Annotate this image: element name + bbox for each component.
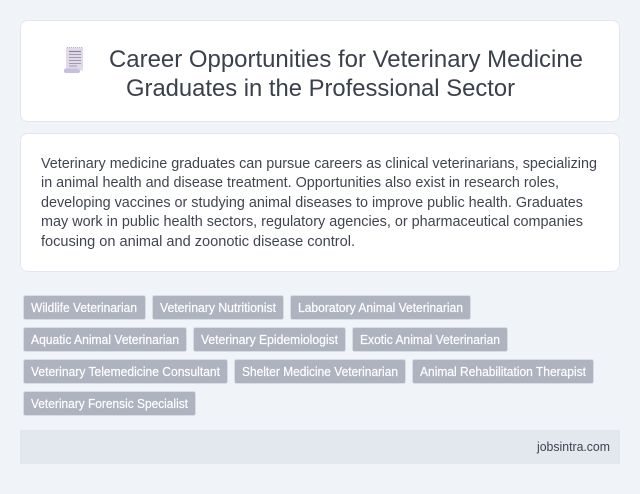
tag: Aquatic Animal Veterinarian: Aquatic Animal Veterinarian [31, 333, 179, 347]
title: Career Opportunities for Veterinary Medicine [109, 46, 583, 73]
tag: Veterinary Epidemiologist: Veterinary Epidemiologist [201, 333, 338, 347]
text block: description: in animal health and disease treatment. Opportunities also exist in research roles, [41, 175, 559, 191]
tag: Exotic Animal Veterinarian [352, 328, 508, 352]
panel: title card [20, 20, 620, 122]
tag: Wildlife Veterinarian [24, 296, 146, 320]
tag: Laboratory Animal Veterinarian [290, 296, 470, 320]
panel: description [20, 134, 620, 272]
tag: Animal Rehabilitation Therapist: Animal Rehabilitation Therapist [420, 365, 586, 379]
title: Graduates in the Professional Sector [126, 75, 515, 102]
title [109, 46, 583, 102]
tag: Veterinary Telemedicine Consultant [24, 360, 228, 384]
tag: Veterinary Forensic Specialist [24, 392, 196, 416]
footer bar [20, 430, 620, 464]
tag: Exotic Animal Veterinarian: Exotic Animal Veterinarian [360, 333, 500, 347]
tag: Animal Rehabilitation Therapist [412, 360, 594, 384]
tag: Veterinary Nutritionist: Veterinary Nutritionist [160, 301, 276, 315]
tag: Aquatic Animal Veterinarian [24, 328, 186, 352]
icon: document scroll [64, 48, 83, 73]
tag: Veterinary Telemedicine Consultant: Veterinary Telemedicine Consultant [31, 365, 220, 379]
tag: Veterinary Forensic Specialist: Veterinary Forensic Specialist [31, 397, 188, 411]
footer text: site name: jobsintra.com [536, 440, 610, 454]
tag: Laboratory Animal Veterinarian: Laboratory Animal Veterinarian [298, 301, 463, 315]
tag: Shelter Medicine Veterinarian [234, 360, 406, 384]
text block: description: may work in public health sectors, regulatory agencies, or pharmaceutical companies [41, 214, 583, 230]
text block: description: Veterinary medicine graduates can pursue careers as clinical veterinarians, specializing [41, 156, 597, 172]
tag list [24, 296, 594, 416]
text block: description [41, 156, 597, 250]
text block: description: developing vaccines or studying animal diseases to improve public health. Graduates [41, 195, 583, 211]
text block: description: focusing on animal and zoonotic disease control. [41, 234, 355, 250]
tag: Veterinary Nutritionist [152, 296, 284, 320]
tag: Wildlife Veterinarian: Wildlife Veterinarian [31, 301, 137, 315]
tag: Veterinary Epidemiologist [194, 328, 346, 352]
tag: Shelter Medicine Veterinarian: Shelter Medicine Veterinarian [242, 365, 398, 379]
